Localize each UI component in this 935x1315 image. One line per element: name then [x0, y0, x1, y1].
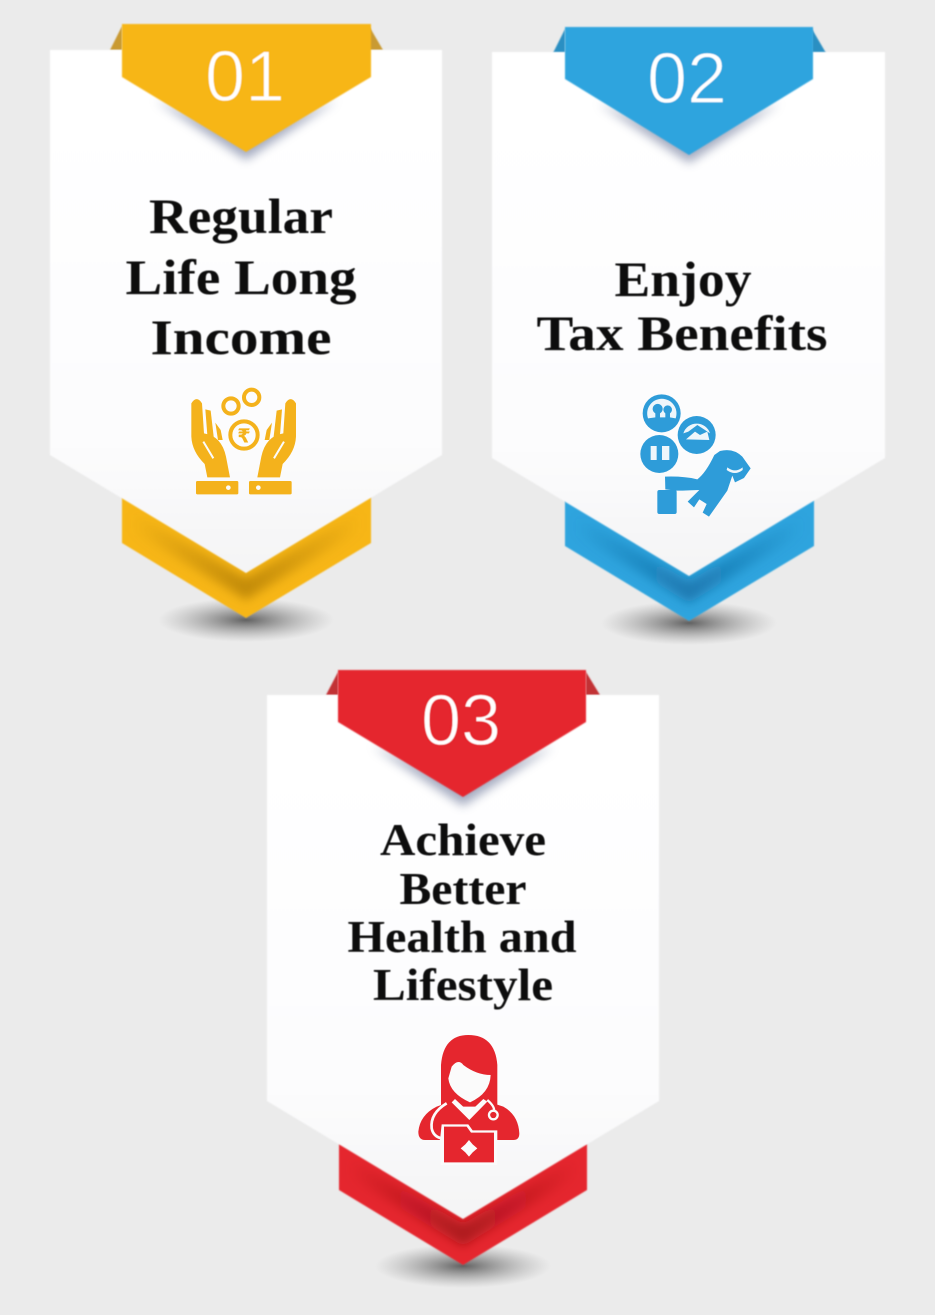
heading: Regular Life Long Income: Regular	[149, 188, 333, 244]
ground shadow	[375, 1244, 551, 1288]
heading: Achieve Better Health and Lifestyle: Achieve	[380, 815, 546, 865]
number 03: 03	[421, 681, 501, 761]
number 02: 02	[647, 39, 727, 119]
heading: Regular Life Long Income	[126, 188, 356, 365]
heading: Regular Life Long Income: Life Long	[126, 249, 356, 305]
ribbon ears	[553, 29, 826, 53]
ribbon fold shadow	[130, 510, 362, 600]
top ribbon	[565, 27, 813, 155]
lower ribbon	[339, 1144, 587, 1265]
icon: female doctor with medical case	[418, 1035, 519, 1165]
heading: Enjoy Tax Benefits	[536, 251, 828, 361]
icon: hands holding rupee coins: ₹	[237, 424, 251, 447]
heading: Enjoy Tax Benefits: Enjoy	[614, 251, 752, 307]
ribbon ears	[326, 672, 600, 695]
card body	[492, 52, 885, 576]
top ribbon shadow	[598, 103, 780, 163]
top ribbon	[122, 24, 371, 152]
lower ribbon	[122, 497, 371, 618]
panel: card 02	[492, 27, 885, 645]
heading: Achieve Better Health and Lifestyle: Better	[400, 864, 526, 914]
ribbon fold shadow	[573, 513, 805, 603]
card body	[50, 50, 442, 573]
panel: card 03	[267, 670, 659, 1288]
heading: Achieve Better Health and Lifestyle: Lifestyle	[373, 960, 553, 1010]
top ribbon shadow	[372, 746, 554, 806]
heading: Achieve Better Health and Lifestyle: Health and	[348, 912, 576, 962]
ribbon fold shadow	[347, 1156, 579, 1246]
ground shadow	[601, 601, 777, 645]
ribbon ears	[110, 26, 383, 50]
card body	[267, 695, 659, 1219]
panel: card 01	[50, 24, 442, 642]
lower ribbon	[565, 500, 814, 621]
top ribbon shadow	[155, 100, 337, 160]
ground shadow	[158, 598, 334, 642]
icon: relaxing person with retirement goals	[640, 394, 751, 517]
icon: hands holding rupee coins	[191, 390, 296, 494]
top ribbon	[338, 670, 586, 797]
number 01: 01	[205, 37, 285, 117]
heading: Enjoy Tax Benefits: Tax Benefits	[536, 305, 828, 361]
heading: Achieve Better Health and Lifestyle	[348, 815, 576, 1010]
heading: Regular Life Long Income: Income	[150, 309, 332, 365]
